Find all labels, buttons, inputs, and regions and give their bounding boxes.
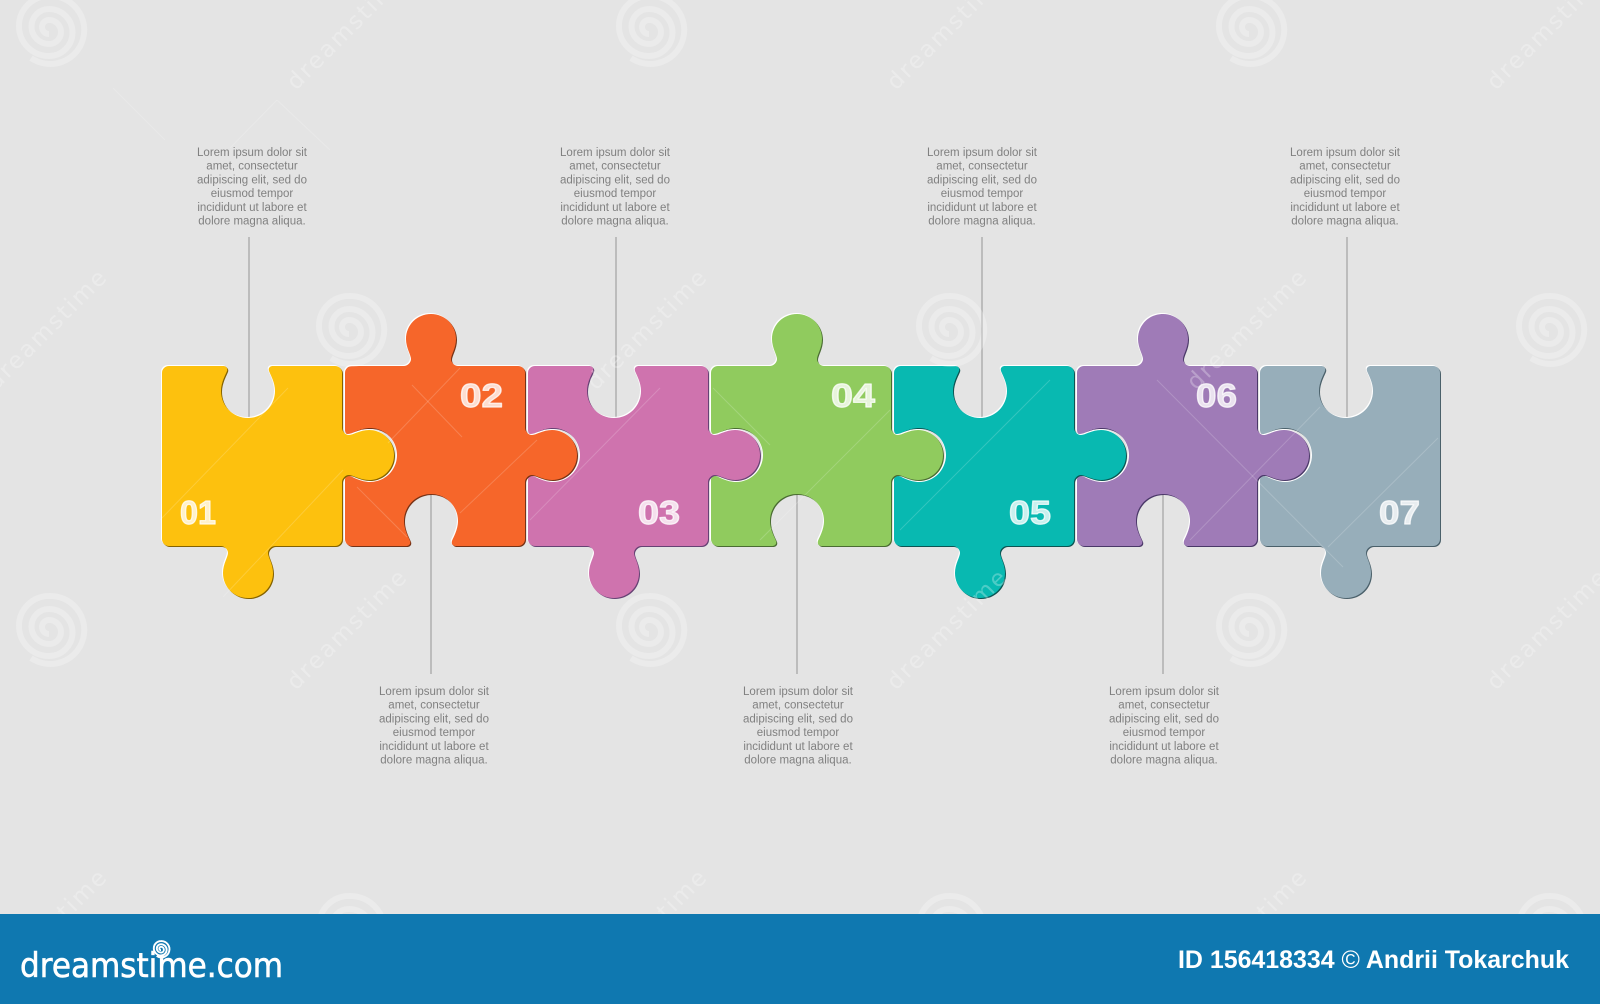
text block 3: incididunt ut labore et xyxy=(560,202,670,214)
text block 3: Lorem ipsum dolor sit xyxy=(560,147,671,159)
number 01: 01 xyxy=(180,494,216,531)
text block 1: dolore magna aliqua. xyxy=(198,216,306,228)
leader lines xyxy=(249,237,1347,674)
text block 1: incididunt ut labore et xyxy=(197,202,307,214)
text block 1: eiusmod tempor xyxy=(211,188,293,200)
text block 5: amet, consectetur xyxy=(936,161,1028,173)
footer band xyxy=(0,914,1600,1004)
puzzle piece 5 xyxy=(894,366,1126,598)
text block 7: eiusmod tempor xyxy=(1304,188,1386,200)
text block 6: incididunt ut labore et xyxy=(1109,741,1219,753)
text block 4: eiusmod tempor xyxy=(757,727,839,739)
footer image id and credit: ID 156418334 © Andrii Tokarchuk xyxy=(1178,946,1569,974)
number 06: 06 xyxy=(1196,377,1237,414)
watermark text: dreamstime xyxy=(282,565,412,695)
text block 4: adipiscing elit, sed do xyxy=(743,713,853,725)
text block 7: amet, consectetur xyxy=(1299,161,1391,173)
text block 1: adipiscing elit, sed do xyxy=(197,174,307,186)
text block 2: Lorem ipsum dolor sit xyxy=(379,686,490,698)
text block 5: Lorem ipsum dolor sit xyxy=(927,147,1038,159)
puzzle piece 3 xyxy=(528,366,760,598)
text block 6: dolore magna aliqua. xyxy=(1110,754,1218,766)
text block 2: incididunt ut labore et xyxy=(379,741,489,753)
watermark diagonal lines xyxy=(113,88,1438,597)
puzzle piece 1 xyxy=(162,366,394,598)
text block 4: incididunt ut labore et xyxy=(743,741,853,753)
text block 6: eiusmod tempor xyxy=(1123,727,1205,739)
text block 7: incididunt ut labore et xyxy=(1290,202,1400,214)
text block 1: Lorem ipsum dolor sit xyxy=(197,147,308,159)
number 02: 02 xyxy=(460,377,503,414)
watermark text: dreamstime xyxy=(1182,865,1312,995)
puzzle piece 4 xyxy=(711,314,943,546)
number 07: 07 xyxy=(1379,494,1420,531)
text block 5: eiusmod tempor xyxy=(941,188,1023,200)
text block 2: dolore magna aliqua. xyxy=(380,754,488,766)
watermark text: dreamstime xyxy=(1182,265,1312,395)
number 03: 03 xyxy=(638,494,680,531)
text block 4: Lorem ipsum dolor sit xyxy=(743,686,854,698)
text block 6: amet, consectetur xyxy=(1118,700,1210,712)
watermark text: dreamstime xyxy=(582,265,712,395)
text block 3: eiusmod tempor xyxy=(574,188,656,200)
puzzle piece 7 xyxy=(1260,366,1440,598)
text block 3: dolore magna aliqua. xyxy=(561,216,669,228)
text block 1: amet, consectetur xyxy=(206,161,298,173)
watermark text: dreamstime xyxy=(882,565,1012,695)
text block 4: dolore magna aliqua. xyxy=(744,754,852,766)
watermark text: dreamstime xyxy=(582,865,712,995)
puzzle piece 2 xyxy=(345,314,577,546)
text block 7: dolore magna aliqua. xyxy=(1291,216,1399,228)
text block 3: adipiscing elit, sed do xyxy=(560,174,670,186)
text block 7: adipiscing elit, sed do xyxy=(1290,174,1400,186)
icon: footer logo spiral xyxy=(154,941,169,957)
text block 2: eiusmod tempor xyxy=(393,727,475,739)
text block 6: adipiscing elit, sed do xyxy=(1109,713,1219,725)
text block 2: adipiscing elit, sed do xyxy=(379,713,489,725)
number 04: 04 xyxy=(831,377,876,414)
number 05: 05 xyxy=(1009,494,1051,531)
text block 5: dolore magna aliqua. xyxy=(928,216,1036,228)
text block 5: incididunt ut labore et xyxy=(927,202,1037,214)
text block 6: Lorem ipsum dolor sit xyxy=(1109,686,1220,698)
text block 5: adipiscing elit, sed do xyxy=(927,174,1037,186)
text block 7: Lorem ipsum dolor sit xyxy=(1290,147,1401,159)
footer logo wordmark: dreamstime.com xyxy=(20,946,283,986)
puzzle piece 6 xyxy=(1077,314,1309,546)
text block 3: amet, consectetur xyxy=(569,161,661,173)
text block 2: amet, consectetur xyxy=(388,700,480,712)
text block 4: amet, consectetur xyxy=(752,700,844,712)
